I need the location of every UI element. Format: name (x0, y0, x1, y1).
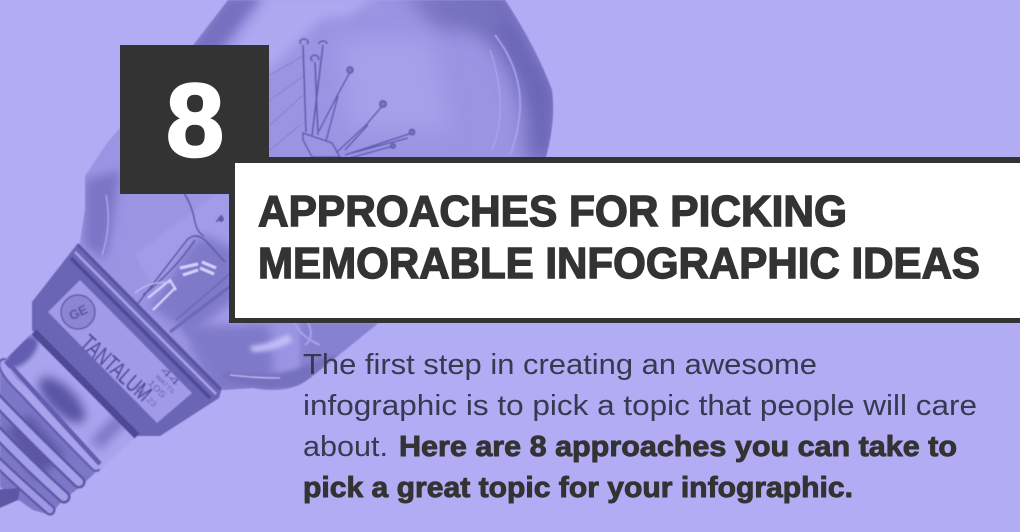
numeral 8: 8 (166, 63, 224, 179)
intro paragraph (303, 349, 977, 504)
title text (258, 187, 980, 288)
intro paragraph: about. (303, 431, 388, 463)
intro paragraph: The first step in creating an awesome (303, 349, 817, 381)
collar label: 105 (146, 377, 168, 400)
title text: MEMORABLE INFOGRAPHIC IDEAS (258, 239, 980, 288)
lamp neck (4, 332, 132, 470)
bold call-out sentence (303, 431, 957, 504)
collar label: WATTS (154, 374, 175, 395)
collar label: TANTALUM (76, 329, 157, 406)
collar label: NO.23 (134, 384, 159, 409)
bold call-out sentence: pick a great topic for your infographic. (303, 472, 853, 504)
illustration: vintage light bulb (0, 0, 560, 515)
bold call-out sentence: Here are 8 approaches you can take to (399, 431, 957, 463)
title panel (229, 157, 1020, 323)
collar label: 44 (158, 365, 182, 389)
screw base threads (0, 332, 130, 515)
metal collar (32, 243, 222, 436)
intro paragraph: infographic is to pick a topic that people will care (303, 390, 977, 422)
collar label: GE (67, 302, 90, 323)
collar label (48, 280, 192, 423)
filament (300, 39, 415, 158)
title text: APPROACHES FOR PICKING (258, 187, 847, 236)
bulb glass (79, 0, 560, 395)
number tile (120, 45, 269, 194)
